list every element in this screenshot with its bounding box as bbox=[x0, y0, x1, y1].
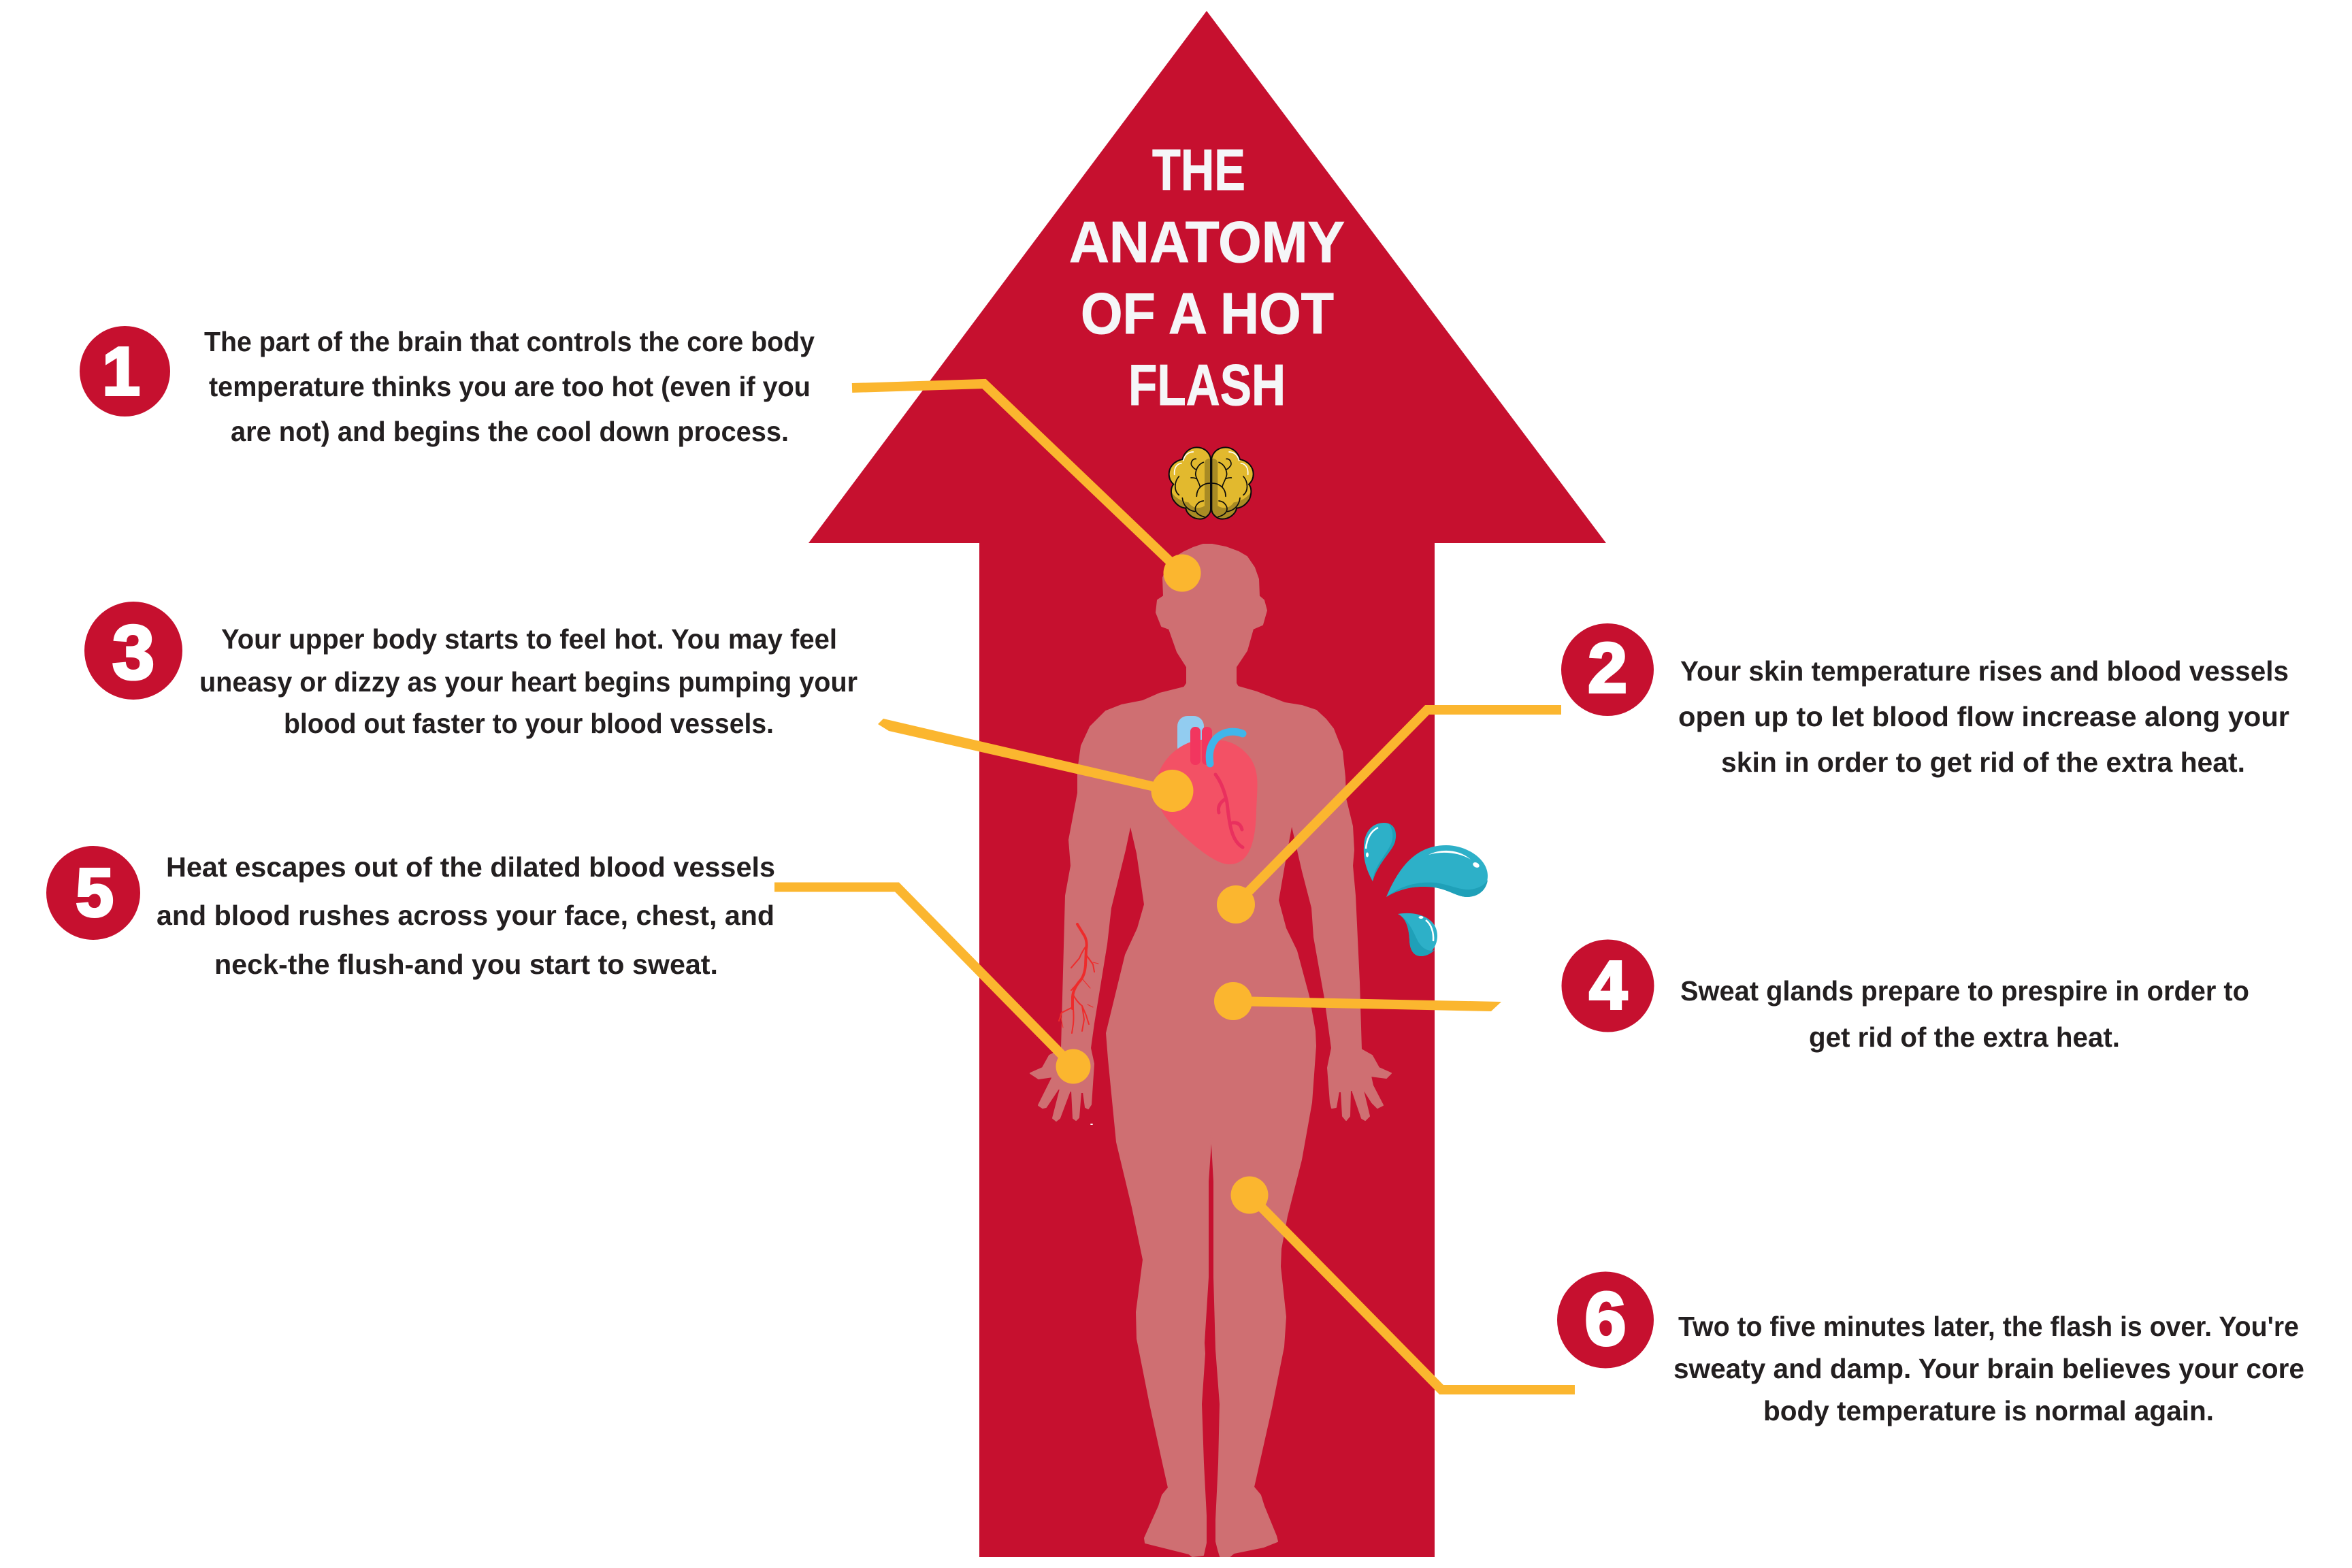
badge 1 bbox=[80, 326, 170, 416]
text: step 4: Sweat glands prepare to prespire in order to bbox=[1680, 975, 2249, 1007]
text: step 5 bbox=[157, 851, 775, 980]
text: step 1: The part of the brain that controls the core body bbox=[204, 326, 815, 357]
badge 6: 6 bbox=[1584, 1277, 1627, 1361]
text: step 3 bbox=[199, 623, 858, 739]
icon: sweat drops bbox=[1364, 823, 1488, 956]
badge 2: 2 bbox=[1588, 629, 1627, 708]
text: step 2 bbox=[1678, 655, 2289, 778]
text: step 4 bbox=[1680, 975, 2249, 1053]
title: ANATOMY bbox=[1069, 210, 1345, 275]
badge 4: 4 bbox=[1589, 947, 1627, 1024]
title: OF A HOT bbox=[1081, 282, 1334, 346]
text: step 6 bbox=[1673, 1311, 2304, 1426]
icon: brain bbox=[1169, 447, 1254, 519]
text: step 5: Heat escapes out of the dilated blood vessels bbox=[166, 851, 775, 883]
text: step 2: skin in order to get rid of the extra heat. bbox=[1721, 747, 2245, 778]
badge 6 bbox=[1557, 1271, 1654, 1368]
icon: heart bbox=[1154, 716, 1258, 864]
text: step 6: body temperature is normal again. bbox=[1763, 1395, 2214, 1426]
text: step 1: are not) and begins the cool down process. bbox=[231, 416, 789, 447]
text: step 5: neck-the flush-and you start to sweat. bbox=[214, 949, 718, 980]
badge 3: 3 bbox=[112, 610, 154, 695]
text: step 3: uneasy or dizzy as your heart begins pumping your bbox=[199, 666, 858, 698]
text: step 1: temperature thinks you are too hot (even if you bbox=[209, 371, 811, 402]
badge 5: 5 bbox=[76, 855, 114, 931]
arrow background bbox=[808, 11, 1606, 1557]
connector 3 bbox=[878, 719, 1194, 812]
text: step 4: get rid of the extra heat. bbox=[1809, 1022, 2120, 1053]
text: step 6: Two to five minutes later, the flash is over. You're bbox=[1678, 1311, 2299, 1342]
connector 4 bbox=[1214, 982, 1501, 1020]
body silhouette bbox=[1030, 544, 1391, 1556]
title bbox=[1069, 138, 1345, 418]
title: THE bbox=[1152, 138, 1245, 203]
connector 1 bbox=[852, 384, 1200, 592]
connector 6 bbox=[1230, 1176, 1575, 1390]
text: step 6: sweaty and damp. Your brain believes your core bbox=[1673, 1353, 2304, 1384]
badge 4 bbox=[1561, 939, 1654, 1032]
text: step 1 bbox=[204, 326, 815, 447]
connector 5 bbox=[774, 887, 1090, 1083]
badge 2 bbox=[1561, 623, 1654, 716]
speck bbox=[1090, 1124, 1093, 1125]
badge 5 bbox=[46, 846, 140, 940]
title: FLASH bbox=[1128, 353, 1286, 418]
badge 3 bbox=[84, 602, 182, 700]
text: step 5: and blood rushes across your face, chest, and bbox=[157, 900, 774, 931]
connector 2 bbox=[1217, 710, 1561, 924]
text: step 2: Your skin temperature rises and blood vessels bbox=[1680, 655, 2289, 687]
text: step 3: blood out faster to your blood vessels. bbox=[284, 708, 774, 739]
badge 1: 1 bbox=[102, 333, 140, 410]
text: step 2: open up to let blood flow increase along your bbox=[1678, 701, 2289, 732]
icon: arm veins bbox=[1059, 924, 1098, 1033]
text: step 3: Your upper body starts to feel hot. You may feel bbox=[221, 623, 837, 655]
